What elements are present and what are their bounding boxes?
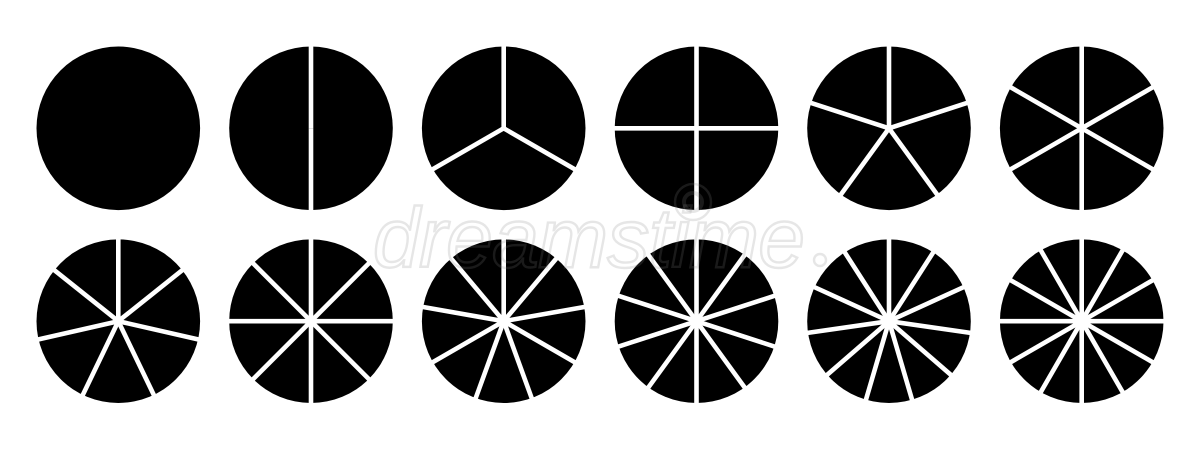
circle: 6 segments [1000, 44, 1164, 212]
circle: 12 segments [998, 237, 1166, 405]
circle: 10 segments [615, 237, 778, 405]
circle: 8 segments [227, 237, 395, 405]
circle: 7 segments [36, 237, 200, 403]
circle: 5 segments [807, 44, 971, 210]
watermark: dreamstime: dreamstime [373, 191, 805, 285]
circle: 11 segments [806, 237, 972, 403]
circle: 3 segments [422, 44, 586, 210]
circle: 4 segments [612, 44, 780, 212]
circle: 1 segment [36, 46, 200, 210]
circle: 2 segments [229, 44, 393, 212]
circle: 9 segments [421, 237, 586, 403]
